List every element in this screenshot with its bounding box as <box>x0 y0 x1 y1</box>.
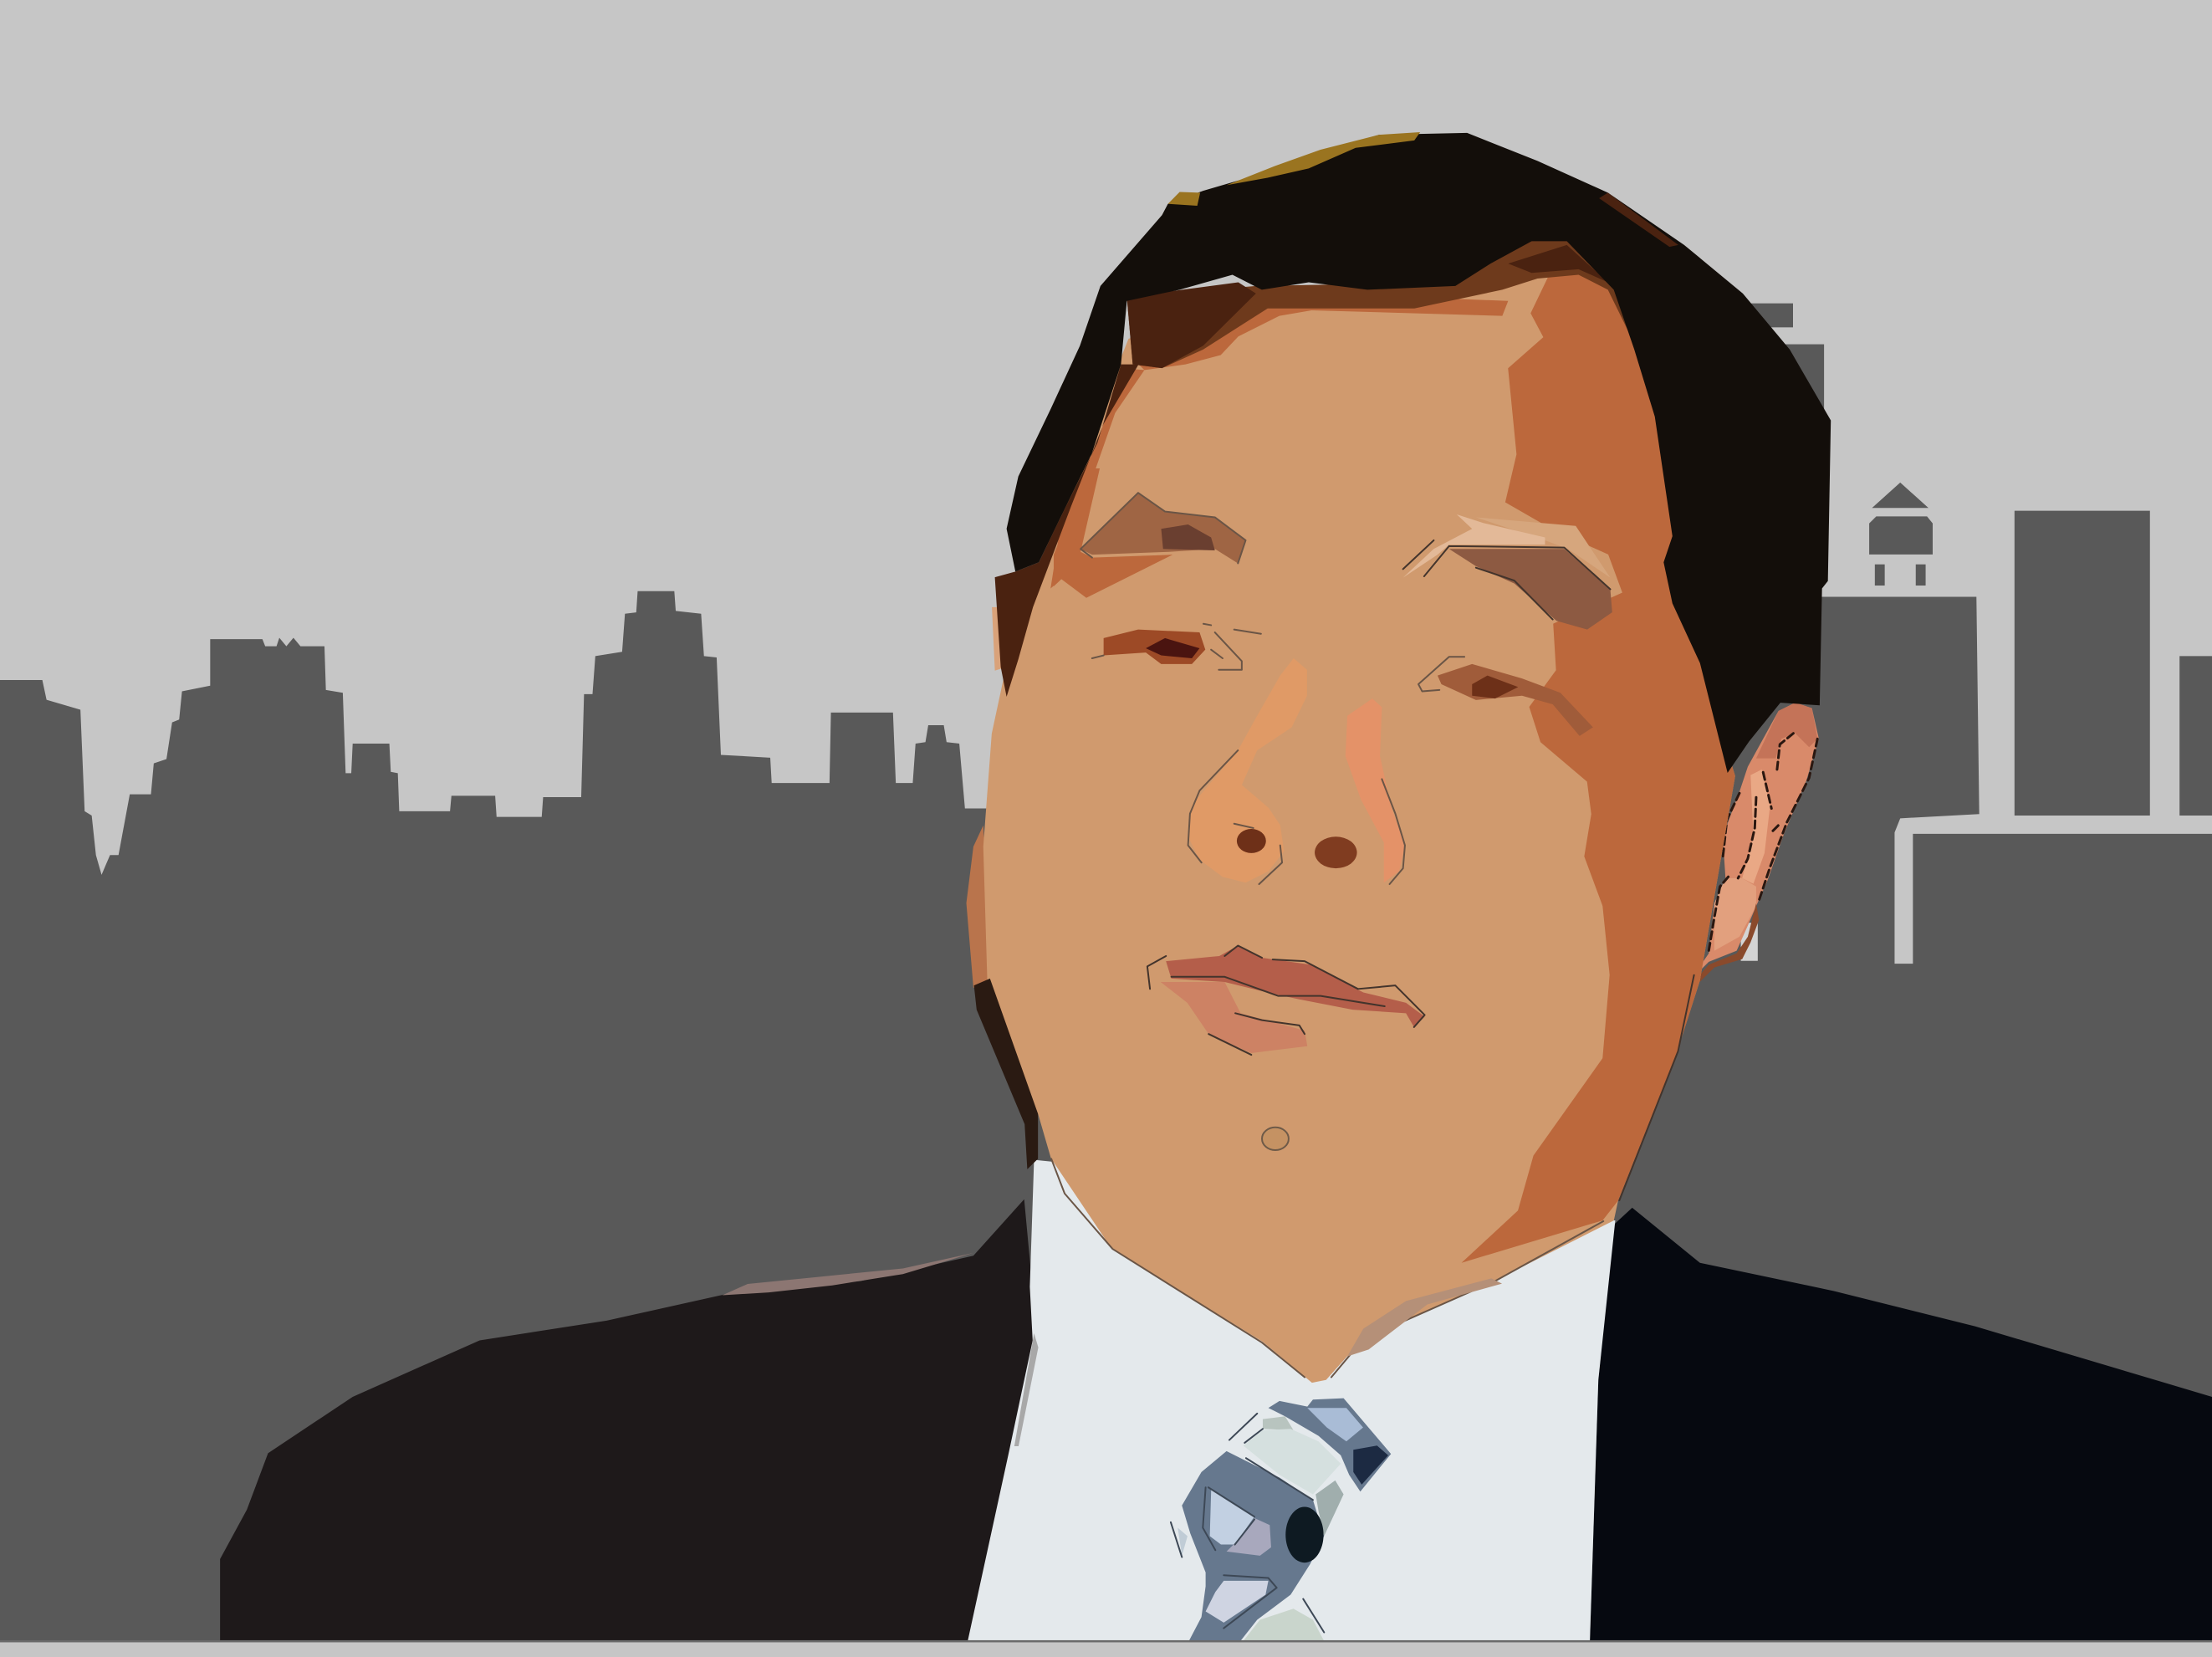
right eye <box>1438 664 1593 736</box>
nose lines <box>1188 750 1405 884</box>
golden highlight <box>1168 132 1420 206</box>
eyes, brows and nose <box>1054 468 1612 884</box>
shirt <box>968 1160 1615 1641</box>
ear <box>1689 703 1819 987</box>
jacket shoulder highlight <box>723 1253 973 1295</box>
right nostril <box>1315 836 1357 868</box>
upper lip <box>1166 946 1425 1027</box>
left eyebrow <box>1080 493 1245 563</box>
right eyebrow <box>1449 549 1612 630</box>
lower lip <box>1161 982 1307 1053</box>
left brow outline <box>1080 493 1245 563</box>
water tower <box>1869 483 1933 586</box>
face outer brown edge <box>967 826 994 988</box>
bottom edge line <box>0 1640 2212 1642</box>
jacket: left <box>220 1199 1044 1641</box>
right eye lines <box>1418 657 1464 692</box>
left eye lines <box>1092 624 1261 670</box>
jacket: right <box>1590 1208 2212 1641</box>
left pupil <box>1146 638 1199 658</box>
dark fringe patch <box>1126 245 1608 368</box>
face base <box>983 240 1735 1383</box>
right brow tan <box>1476 517 1610 578</box>
left socket shadow <box>1054 468 1172 598</box>
neck shadow <box>1347 1278 1502 1357</box>
right pupil <box>1472 676 1518 698</box>
inner dark brown strip <box>995 365 1138 697</box>
face shadow <box>1462 240 1735 1263</box>
black hair mass <box>1007 133 1831 773</box>
sideburn skin sliver <box>992 607 1015 671</box>
tie <box>1171 1399 1391 1641</box>
brown fringe <box>1126 233 1661 376</box>
light gap near ear <box>1741 923 1758 961</box>
nose right highlight <box>1346 698 1405 882</box>
lip lines <box>1147 946 1425 1055</box>
temple orange strip <box>1050 368 1144 588</box>
shirt collar shadow <box>1014 1333 1039 1446</box>
left nostril <box>1237 829 1266 853</box>
chin dimple <box>1262 1128 1289 1150</box>
jaw line <box>974 975 1694 1378</box>
right brow lines <box>1403 540 1610 620</box>
skyline: right buildings <box>1552 304 2212 1644</box>
bottom strip <box>0 1641 2212 1657</box>
skyline: left <box>0 591 1101 1644</box>
left brow dark <box>1161 524 1215 550</box>
left eye <box>1104 630 1205 664</box>
right brow highlight <box>1403 514 1545 578</box>
forehead orange band <box>1138 297 1508 370</box>
right hair brown streak <box>1599 192 1678 247</box>
chin, lips and neck detail <box>1147 946 1502 1357</box>
hair <box>992 132 1831 773</box>
nose left highlight <box>1188 658 1307 882</box>
